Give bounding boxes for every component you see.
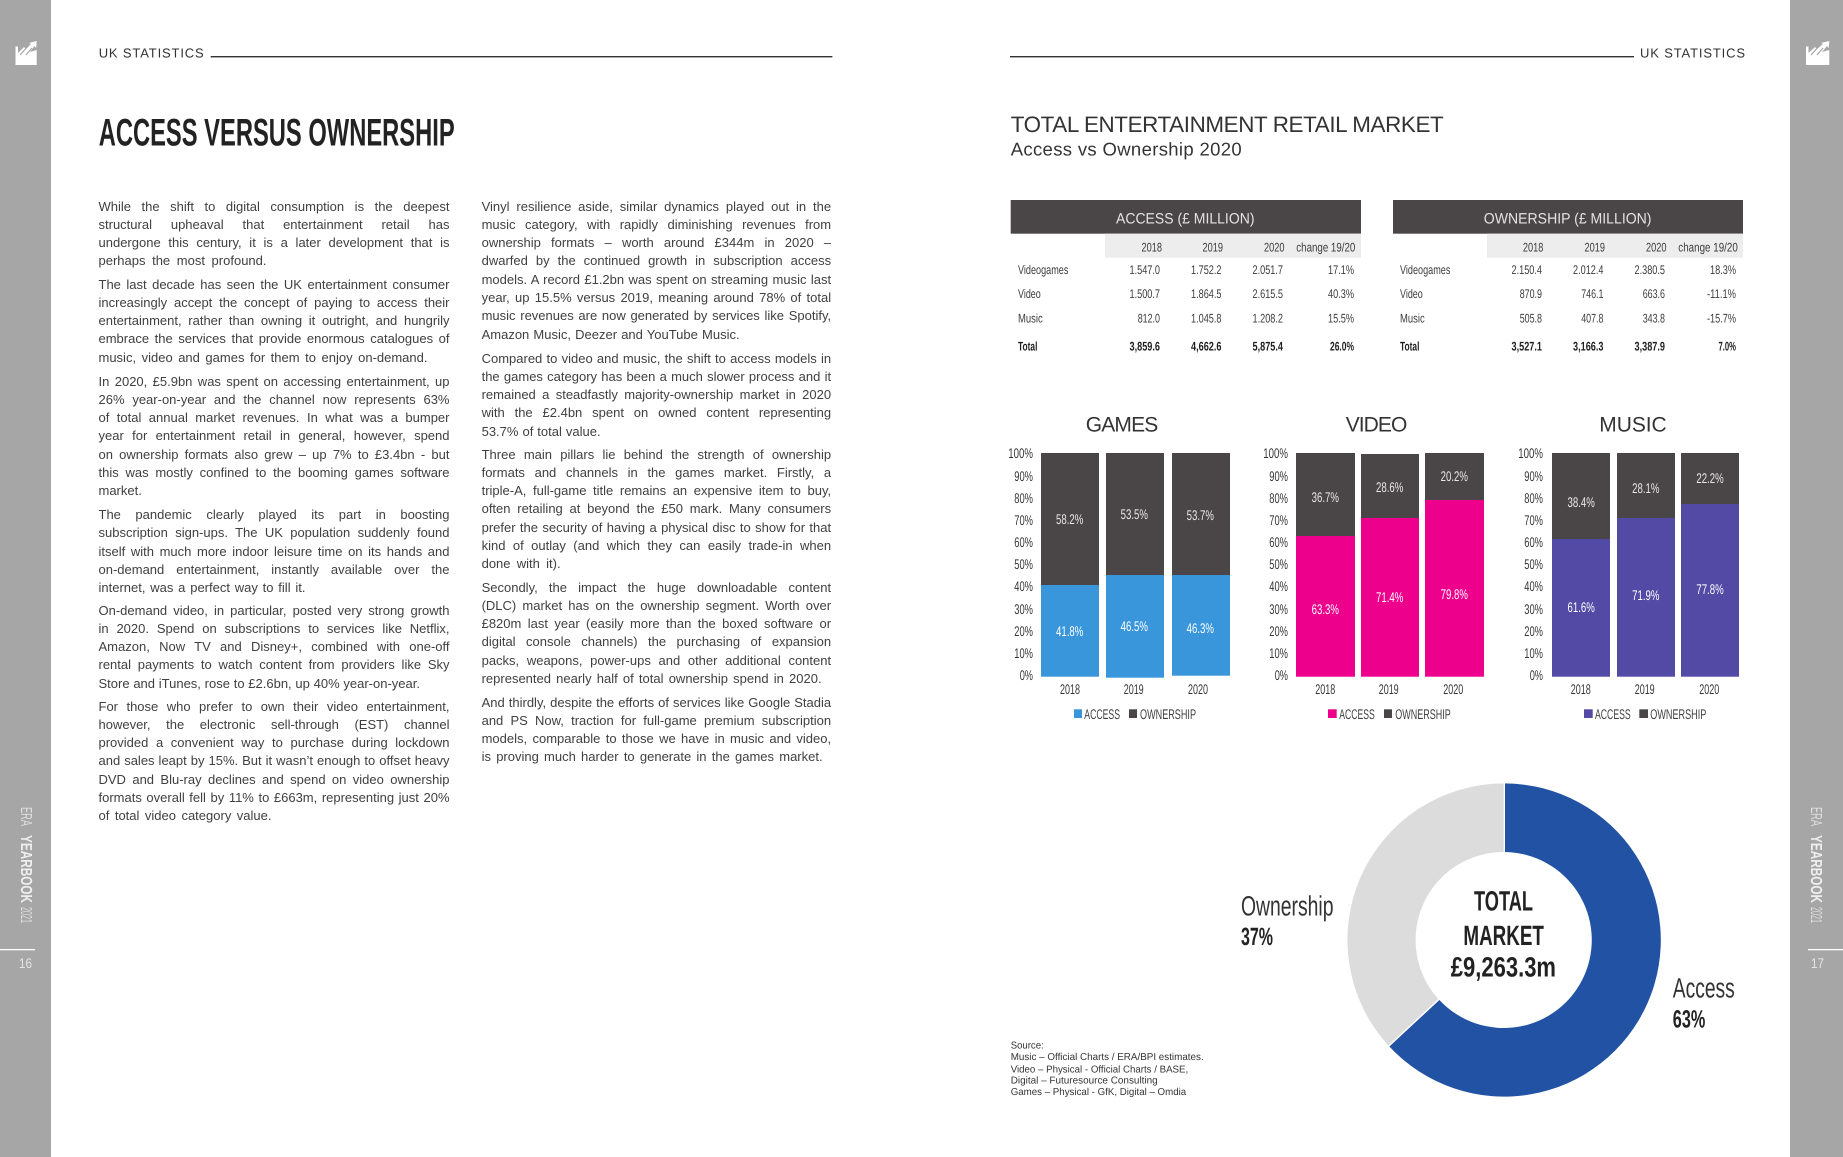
body text paragraph 10: Secondly, the impact the huge downloadable content (482, 580, 831, 594)
legend: music (1584, 706, 1706, 722)
y axis: video: 80% (1269, 490, 1288, 506)
y axis: games: 20% (1014, 623, 1033, 639)
source note: Music – Official Charts / ERA/BPI estimates. (1011, 1052, 1204, 1063)
donut centre label: TOTAL (1474, 886, 1533, 917)
body text paragraph 7: models. A record £1.2bn was spent on streaming music last (482, 272, 831, 287)
row: music: 407.8 (1581, 312, 1604, 326)
donut label: ownership: 37% (1241, 923, 1273, 951)
body text paragraph 10: packs, weapons, power-ups and other additional content (482, 653, 831, 668)
body text paragraph 4: itself with much more indoor leisure time on its hands and (98, 544, 450, 559)
row: music: 812.0 (1138, 312, 1160, 326)
body text paragraph 8: with the £2.4bn spent on owned content representing (482, 405, 831, 420)
row: videogames: 2.051.7 (1252, 263, 1283, 277)
bar: video 2019: 71.4% (1376, 589, 1403, 605)
body text paragraph 6: provided a convenient way to purchase during lockdown (98, 735, 450, 750)
bar: video 2019 (1361, 454, 1419, 697)
bar: games 2018: 41.8% (1056, 623, 1083, 639)
body text paragraph 5: Amazon, Now TV and Disney+, combined with one-off (98, 639, 450, 654)
chart section heading: Access vs Ownership 2020 (1011, 139, 1242, 160)
bar: video 2020: 20.2% (1441, 468, 1468, 484)
row: videogames: 1.547.0 (1130, 263, 1160, 277)
y axis: video: 50% (1269, 556, 1288, 572)
sidebar vertical label right: YEARBOOK (1807, 835, 1824, 903)
bar: music 2020 (1681, 453, 1739, 697)
row: total (1400, 340, 1736, 354)
row: total: 7.0% (1718, 340, 1736, 354)
y axis: video: 60% (1269, 534, 1288, 550)
donut centre label: MARKET (1463, 920, 1544, 951)
row: video: 1.500.7 (1130, 287, 1160, 301)
body text paragraph 6: of total video category value. (98, 808, 272, 823)
row: video (1018, 287, 1354, 301)
body text paragraph 11: models, comparable to those we have in music and video, (482, 731, 831, 746)
body text paragraph 7: Amazon Music, Deezer and YouTube Music. (482, 327, 740, 342)
chart: video (1263, 414, 1484, 722)
body text paragraph 4: internet, was a perfect way to fill it. (98, 580, 306, 595)
table heading: access: ACCESS (£ MILLION) (1116, 210, 1254, 228)
table: access (1011, 200, 1361, 354)
row: videogames: 1.752.2 (1191, 263, 1222, 277)
y axis: music: 40% (1524, 578, 1543, 594)
body text paragraph 11 (482, 694, 832, 764)
row: videogames (1018, 263, 1354, 277)
column headers: change 19/20 (1296, 240, 1355, 254)
legend: games (1074, 706, 1196, 722)
row: videogames: 2.012.4 (1573, 263, 1604, 277)
main title: ACCESS VERSUS OWNERSHIP (99, 112, 455, 155)
row: music: Music (1400, 312, 1425, 326)
y axis: video (1263, 445, 1288, 683)
column headers: 2020 (1646, 240, 1667, 254)
body text paragraph 4: The pandemic clearly played its part in boosting (98, 507, 450, 522)
y axis: games: 60% (1014, 534, 1033, 550)
body text paragraph 8 (482, 350, 831, 439)
y axis: games: 0% (1020, 667, 1033, 683)
row: music: -15.7% (1707, 312, 1736, 326)
sidebar vertical label right: ERA (1807, 807, 1824, 826)
body text paragraph 3: year for entertainment retail in general, however, spend (98, 428, 450, 443)
column headers: 2019 (1584, 240, 1605, 254)
body text paragraph 1: structural upheaval that entertainment retail has (98, 217, 450, 232)
donut label: access: 63% (1673, 1006, 1705, 1034)
body text paragraph 3 (98, 374, 450, 498)
body text paragraph 2: entertainment, rather than owning it outright, and hungrily (98, 313, 450, 328)
body text paragraph 7: Vinyl resilience aside, similar dynamics played out in the (482, 198, 831, 214)
body text paragraph 4: on-demand entertainment, instantly available over the (98, 562, 450, 577)
body text paragraph 11: is proving much harder to generate in the games market. (482, 749, 823, 764)
body text paragraph 9 (482, 446, 832, 571)
bar: music 2019: 71.9% (1632, 587, 1659, 603)
body text paragraph 1: perhaps the most profound. (98, 253, 266, 268)
bar: games 2019 (1106, 453, 1164, 697)
row: video: Video (1018, 287, 1041, 301)
y axis: music (1518, 445, 1543, 683)
bar: music 2019: 28.1% (1632, 480, 1659, 496)
row: video (1400, 287, 1736, 301)
row: music: 15.5% (1328, 312, 1354, 326)
body text paragraph 6: formats overall fell by 11% to £663m, representing just 20% (98, 790, 450, 805)
legend: games: OWNERSHIP (1140, 706, 1196, 722)
body text paragraph 6 (98, 698, 450, 823)
body text paragraph 10: digital console channels) the purchasing of expansion (482, 634, 831, 649)
bar: music 2018 (1552, 453, 1610, 697)
body text paragraph 8: remained a steadfastly majority-ownership market in 2020 (482, 387, 831, 402)
body text paragraph 10: represented nearly half of total ownership spend in 2020. (482, 671, 822, 686)
bar: music 2020: 2020 (1699, 681, 1719, 697)
legend: video: OWNERSHIP (1395, 706, 1451, 722)
y axis: video: 10% (1269, 645, 1288, 661)
body text paragraph 4 (98, 507, 450, 595)
body text paragraph 7: year, up 15.5% versus 2019, meaning around 78% of total (482, 290, 831, 305)
body text paragraph 8: 53.7% of total value. (482, 424, 601, 439)
row: videogames: Videogames (1018, 263, 1068, 277)
row: total: 5,875.4 (1252, 340, 1283, 354)
body text paragraph 2: embrace the services that provide enormous catalogues of (98, 331, 450, 346)
chart title: games: GAMES (1086, 414, 1158, 437)
body text paragraph 11: And thirdly, despite the efforts of services like Google Stadia (482, 694, 831, 710)
body text paragraph 10: (DLC) market has on the ownership segment. Worth over (482, 598, 831, 613)
bar: video 2018: 36.7% (1312, 489, 1339, 505)
row: music (1018, 312, 1354, 326)
page number 17: 17 (1811, 955, 1824, 971)
row: video: 746.1 (1581, 287, 1604, 301)
icon: factory chart right (1806, 41, 1829, 65)
column headers: 2020 (1264, 240, 1285, 254)
y axis: music: 70% (1524, 512, 1543, 528)
sidebar vertical label left: YEARBOOK (17, 835, 34, 903)
row: total (1018, 340, 1354, 354)
chart: music (1518, 414, 1739, 722)
donut label: access (1673, 972, 1735, 1034)
donut segment: ownership 37% (1347, 783, 1504, 1046)
row: videogames: Videogames (1400, 263, 1450, 277)
bar: games 2018 (1041, 453, 1099, 697)
body text paragraph 7: music category, with rapidly diminishing revenues from (482, 217, 831, 232)
body text paragraph 9: Three main pillars lie behind the strength of ownership (482, 446, 831, 462)
bar: video 2019: 28.6% (1376, 479, 1403, 495)
bar: games 2020: 2020 (1188, 681, 1208, 697)
row: music: Music (1018, 312, 1043, 326)
bar: music 2020: 22.2% (1696, 470, 1724, 486)
body text paragraph 9: kind of outlay (and which they can easily trade-in when (482, 538, 831, 553)
column headers: 2019 (1202, 240, 1223, 254)
y axis: video: 100% (1263, 445, 1288, 461)
body text paragraph 8: Compared to video and music, the shift to access models in (482, 350, 831, 366)
column headers (1142, 240, 1355, 254)
body text paragraph 2: The last decade has seen the UK entertainment consumer (98, 276, 450, 292)
chart title: video: VIDEO (1346, 414, 1407, 437)
y axis: games: 10% (1014, 645, 1033, 661)
y axis: games (1008, 445, 1033, 683)
row: video: Video (1400, 287, 1423, 301)
bar: video 2020 (1425, 453, 1484, 697)
legend: video: ACCESS (1339, 706, 1375, 722)
source note: Source: (1011, 1040, 1044, 1052)
bar: games 2020: 46.3% (1187, 620, 1214, 636)
body text paragraph 5 (98, 602, 450, 691)
y axis: music: 30% (1524, 601, 1543, 617)
y axis: games: 40% (1014, 578, 1033, 594)
y axis: video: 90% (1269, 468, 1288, 484)
body text paragraph 7 (482, 198, 832, 342)
legend: video (1328, 706, 1451, 722)
right page sidebar: 2021 (1807, 907, 1824, 923)
y axis: games: 70% (1014, 512, 1033, 528)
body text paragraph 8: the games category has been a much slower process and it (482, 369, 831, 384)
body text paragraph 2 (98, 276, 450, 365)
row: music: 343.8 (1643, 312, 1665, 326)
body text paragraph 5: rental payments to watch content from providers like Sky (98, 657, 450, 672)
donut segment: access 63% (1389, 783, 1661, 1097)
body text paragraph 7: ownership formats – worth around £344m in 2020 – (482, 235, 831, 250)
body text paragraph 3: In 2020, £5.9bn was spent on accessing entertainment, up (98, 374, 450, 388)
y axis: music: 50% (1524, 556, 1543, 572)
bar: video 2020: 2020 (1443, 681, 1463, 697)
row: videogames: 18.3% (1710, 263, 1736, 277)
bar: music 2018: 2018 (1571, 681, 1591, 697)
body text paragraph 6: and sales leapt by 15%. But it wasn’t enough to offset heavy (98, 753, 450, 768)
row: video: 1.864.5 (1191, 287, 1222, 301)
left page sidebar (0, 0, 51, 1157)
row: total: 3,859.6 (1130, 340, 1160, 354)
row: video: 870.9 (1520, 287, 1542, 301)
bar: games 2019: 2019 (1124, 681, 1144, 697)
body text paragraph 10 (482, 580, 831, 686)
chart title: music: MUSIC (1599, 414, 1667, 437)
bar: music 2018: 61.6% (1568, 599, 1595, 615)
row: music: 505.8 (1520, 312, 1542, 326)
y axis: music: 80% (1524, 490, 1543, 506)
body text paragraph 3: on ownership formats also grew – up 7% to £3.4bn - but (98, 447, 450, 462)
y axis: music: 20% (1524, 623, 1543, 639)
body text paragraph 9: prefer the security of having a physical disc to show for that (482, 520, 831, 535)
bar: games 2019: 46.5% (1121, 618, 1148, 634)
y axis: music: 10% (1524, 645, 1543, 661)
table: ownership (1393, 200, 1743, 354)
chart section heading (1011, 112, 1444, 160)
body text paragraph 1 (98, 198, 450, 268)
row: video: 2.615.5 (1252, 287, 1283, 301)
bar: games 2020 (1172, 453, 1230, 697)
page number 16: 16 (19, 955, 32, 971)
bar: video 2018: 2018 (1315, 681, 1335, 697)
y axis: video: 0% (1275, 667, 1288, 683)
body text paragraph 2: music, video and games for them to enjoy on-demand. (98, 350, 428, 365)
row: total: 26.0% (1330, 340, 1354, 354)
donut label: access: Access (1673, 972, 1735, 1003)
donut centre label (1451, 886, 1556, 983)
row: total: 3,387.9 (1634, 340, 1665, 354)
sidebar vertical label left: ERA (17, 807, 34, 826)
y axis: games: 30% (1014, 601, 1033, 617)
y axis: video: 30% (1269, 601, 1288, 617)
y axis: games: 80% (1014, 490, 1033, 506)
body text paragraph 1: While the shift to digital consumption is the deepest (98, 198, 450, 214)
row: video: 663.6 (1643, 287, 1665, 301)
legend: games: ACCESS (1084, 706, 1120, 722)
source note: Video – Physical - Official Charts / BASE, (1011, 1064, 1188, 1076)
body text paragraph 7: music revenues are now generated by services like Spotify, (482, 308, 831, 323)
bar: games 2019: 53.5% (1121, 506, 1148, 522)
row: videogames: 2.380.5 (1634, 263, 1665, 277)
body text paragraph 3: of total annual market revenues. In what was a bumper (98, 410, 450, 425)
bar: music 2018: 38.4% (1568, 494, 1595, 510)
bar: video 2019: 2019 (1379, 681, 1399, 697)
body text paragraph 5: in 2020. Spend on subscriptions to services like Netflix, (98, 621, 450, 636)
legend: music: ACCESS (1595, 706, 1631, 722)
source note (1011, 1040, 1204, 1098)
row: total: 3,527.1 (1512, 340, 1542, 354)
y axis: music: 90% (1524, 468, 1543, 484)
row: videogames (1400, 263, 1736, 277)
body text paragraph 9: done with it). (482, 556, 561, 571)
body text paragraph 1: undergone this century, it is a later development that is (98, 235, 450, 250)
donut chart: total market (1241, 783, 1735, 1097)
column headers: change 19/20 (1678, 240, 1738, 254)
running header right: UK STATISTICS (1640, 45, 1745, 60)
row: music: 1.208.2 (1252, 312, 1283, 326)
body text paragraph 4: subscription sign-ups. The UK population suddenly found (98, 525, 450, 540)
source note: Games – Physical - GfK, Digital – Omdia (1011, 1087, 1187, 1098)
legend: music: OWNERSHIP (1650, 706, 1706, 722)
bar: games 2020: 53.7% (1187, 507, 1214, 523)
donut label: ownership: Ownership (1241, 891, 1334, 922)
row: total: Total (1018, 340, 1037, 354)
icon: factory chart left (16, 41, 37, 65)
bar: music 2019 (1617, 453, 1675, 697)
column headers: 2018 (1142, 240, 1162, 254)
bar: video 2018: 63.3% (1312, 601, 1339, 617)
row: video: 40.3% (1328, 287, 1354, 301)
source note: Digital – Futuresource Consulting (1011, 1076, 1158, 1086)
body text paragraph 9: often retailing at beyond the £50 mark. Many consumers (482, 501, 831, 516)
body text paragraph 5: On-demand video, in particular, posted very strong growth (98, 602, 450, 618)
y axis: games: 90% (1014, 468, 1033, 484)
row: total: 4,662.6 (1191, 340, 1222, 354)
body text paragraph 9: formats and channels in the games market. Firstly, a (482, 465, 831, 480)
body text paragraph 3: market. (98, 483, 142, 498)
row: video: -11.1% (1707, 287, 1736, 301)
bar: music 2019: 2019 (1635, 681, 1655, 697)
y axis: music: 0% (1530, 667, 1543, 683)
row: music (1400, 312, 1736, 326)
body text paragraph 6: however, the electronic sell-through (EST) channel (98, 717, 450, 732)
bar: music 2020: 77.8% (1696, 581, 1724, 597)
bar: games 2018: 2018 (1060, 681, 1080, 697)
chart: games (1008, 414, 1230, 722)
row: videogames: 2.150.4 (1512, 263, 1542, 277)
row: total: 3,166.3 (1573, 340, 1604, 354)
y axis: music: 60% (1524, 534, 1543, 550)
row: total: Total (1400, 340, 1419, 354)
y axis: music: 100% (1518, 445, 1543, 461)
body text paragraph 2: increasingly accept the concept of paying to access their (98, 295, 450, 310)
y axis: video: 70% (1269, 512, 1288, 528)
bar: games 2018: 58.2% (1056, 511, 1083, 527)
y axis: video: 40% (1269, 578, 1288, 594)
y axis: games: 50% (1014, 556, 1033, 572)
y axis: video: 20% (1269, 623, 1288, 639)
body text paragraph 7: dwarfed by the continued growth in subscription access (482, 253, 831, 268)
y axis: games: 100% (1008, 445, 1033, 461)
chart section heading: TOTAL ENTERTAINMENT RETAIL MARKET (1011, 112, 1444, 137)
body text paragraph 10: £820m last year (easily more than the boxed software or (482, 616, 831, 631)
body text paragraph 6: For those who prefer to own their video entertainment, (98, 698, 450, 714)
running header left: UK STATISTICS (99, 45, 204, 60)
right page sidebar (1790, 0, 1843, 1157)
body text paragraph 3: 26% year-on-year and the channel now represents 63% (98, 392, 450, 407)
left page sidebar: 2021 (17, 907, 34, 923)
column headers (1523, 240, 1738, 254)
bar: video 2020: 79.8% (1441, 586, 1468, 602)
body text paragraph 3: this was mostly confined to the booming games software (98, 465, 450, 480)
column headers: 2018 (1523, 240, 1543, 254)
body text paragraph 5: Store and iTunes, rose to £2.6bn, up 40% year-on-year. (98, 676, 420, 691)
bar: video 2018 (1296, 453, 1355, 697)
body text paragraph 11: and PS Now, traction for full-game premium subscription (482, 713, 831, 728)
donut centre label: £9,263.3m (1451, 952, 1556, 983)
donut label: ownership (1241, 891, 1334, 951)
row: music: 1.045.8 (1191, 312, 1222, 326)
body text paragraph 6: DVD and Blu-ray declines and spend on video ownership (98, 772, 450, 787)
row: videogames: 17.1% (1328, 263, 1354, 277)
body text paragraph 9: triple-A, full-game title remains an expensive item to buy, (482, 483, 831, 498)
table heading: ownership: OWNERSHIP (£ MILLION) (1484, 210, 1652, 228)
